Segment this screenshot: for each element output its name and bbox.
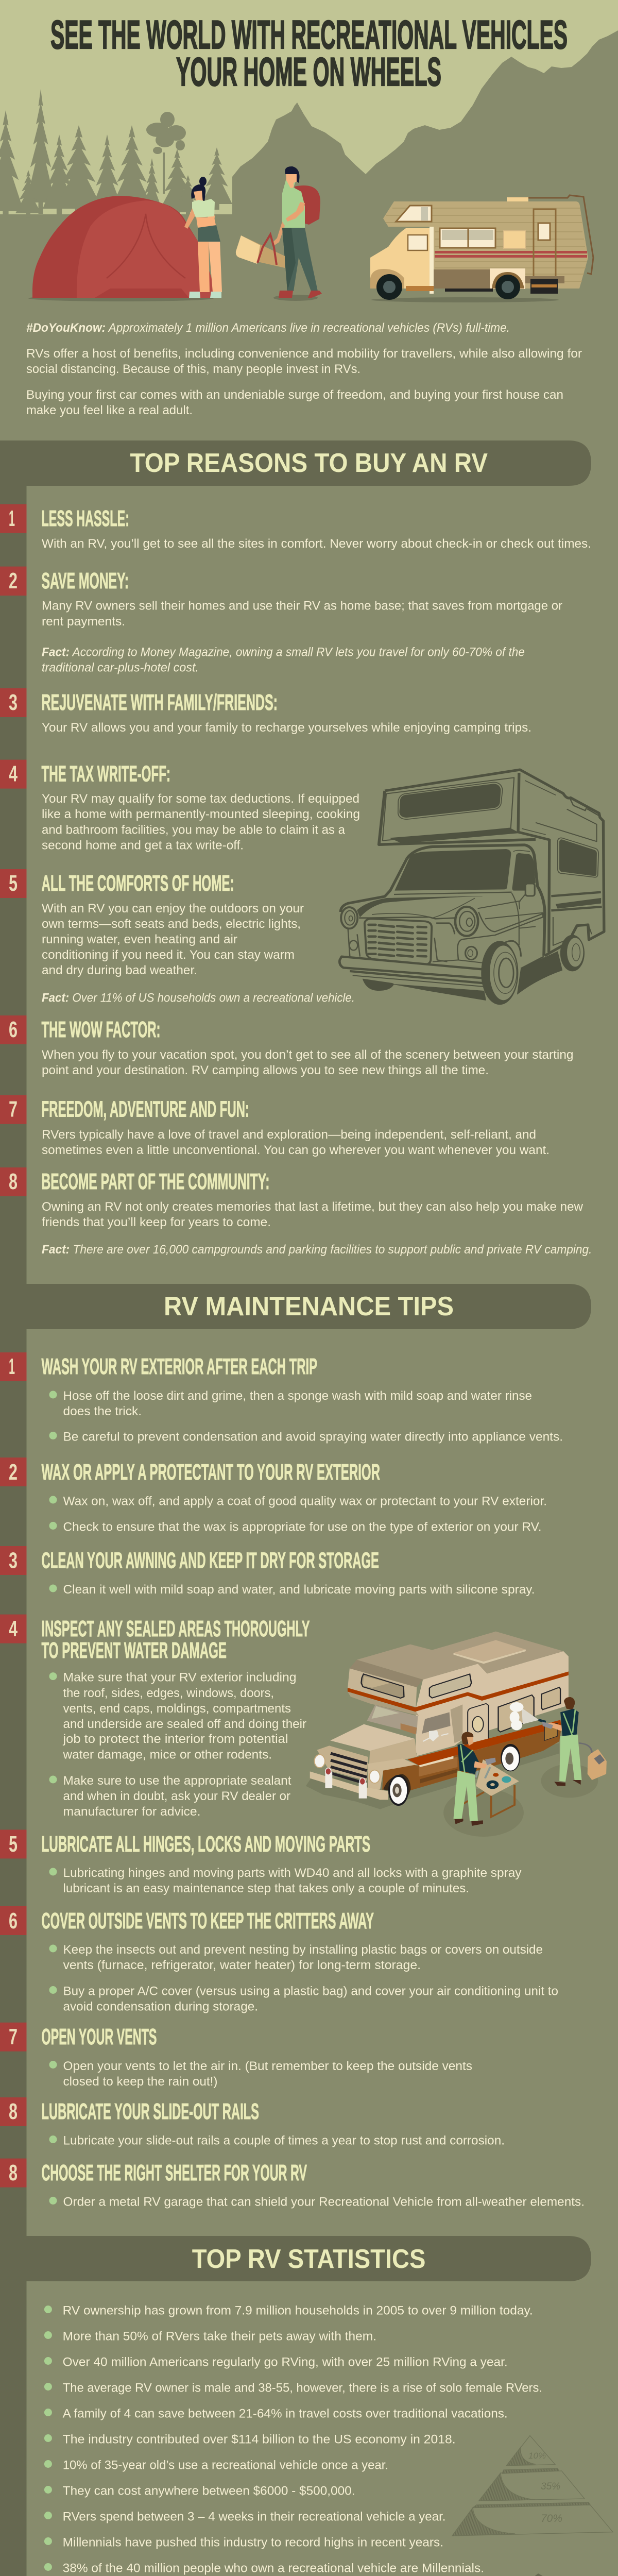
tip 4: water damage, mice or other rodents.	[62, 1748, 272, 1762]
tip 7: Open your vents to let the air in. (But remember to keep the outside vents	[63, 2059, 472, 2073]
tip 1: Hose off the loose dirt and grime, then a sponge wash with mild soap and water rinse	[63, 1389, 532, 1403]
tip 9: 8	[9, 2160, 18, 2185]
reason 8: Owning an RV not only creates memories that last a lifetime, but they can also help you make new	[42, 1200, 583, 1214]
intro text: make you feel like a real adult.	[26, 403, 193, 417]
reason 4	[0, 760, 360, 853]
reason 1: LESS HASSLE:	[41, 506, 129, 531]
illustration: sketched percentage pyramid: 10%	[528, 2451, 546, 2461]
tip 1: Be careful to prevent condensation and avoid spraying water directly into appliance vents.	[63, 1430, 563, 1444]
tip 2: Check to ensure that the wax is appropriate for use on the type of exterior on your RV.	[63, 1520, 542, 1534]
tip 9	[0, 2159, 585, 2209]
header scene background	[0, 0, 618, 217]
reason 4: and bathroom facilities, you may be able to claim it as a	[42, 823, 346, 837]
tip 5: lubricant is an easy maintenance step that takes only a couple of minutes.	[63, 1882, 469, 1895]
statistics list: Millennials have pushed this industry to record highs in recent years.	[63, 2536, 443, 2549]
illustration: woman camper	[184, 177, 222, 298]
reason 7: RVers typically have a love of travel and exploration—being independent, self-reliant, and	[42, 1128, 536, 1142]
reason 5: 5	[9, 871, 18, 896]
reason 7: sometimes even a little unconventional. You can go wherever you want whenever you want.	[42, 1143, 550, 1157]
reason 6: point and your destination. RV camping allows you to see new things all the time.	[42, 1063, 489, 1077]
tip 3: 3	[9, 1548, 18, 1573]
illustration: man with backpack and bag	[236, 166, 322, 301]
title	[50, 12, 568, 94]
section heading: statistics	[0, 2236, 591, 2281]
tip 6: Keep the insects out and prevent nesting by installing plastic bags or covers on outside	[63, 1943, 543, 1957]
reason 5: running water, even heating and air	[42, 933, 237, 946]
tip 3: Clean it well with mild soap and water, and lubricate moving parts with silicone spray.	[63, 1583, 535, 1597]
illustration: truck camper silhouette	[339, 770, 604, 1005]
reason 7: 7	[9, 1096, 18, 1122]
reason 2: Many RV owners sell their homes and use their RV as home base; that saves from mortgage or	[42, 599, 562, 613]
intro text: RVs offer a host of benefits, including convenience and mobility for travellers, while also allowing for	[26, 347, 582, 361]
tip 1: does the trick.	[63, 1404, 142, 1418]
tip 4: Make sure to use the appropriate sealant	[63, 1774, 291, 1788]
illustration: red tent	[28, 196, 219, 301]
tip 4: 4	[9, 1616, 18, 1641]
statistics list: 38% of the 40 million people who own a recreational vehicle are Millennials.	[63, 2562, 484, 2575]
reason 4: second home and get a tax write-off.	[42, 839, 244, 853]
reason 7	[0, 1095, 550, 1157]
tip 2: 2	[9, 1460, 18, 1485]
reason 4: like a home with permanently-mounted sleeping, cooking	[42, 807, 360, 821]
reason 5: ALL THE COMFORTS OF HOME:	[41, 871, 234, 896]
tip 4: TO PREVENT WATER DAMAGE	[41, 1638, 227, 1663]
reason 6	[0, 1015, 574, 1077]
reason 4: THE TAX WRITE-OFF:	[41, 761, 170, 786]
statistics list: More than 50% of RVers take their pets away with them.	[63, 2330, 376, 2343]
reason 3: 3	[9, 690, 18, 715]
reason 5: own terms—soft seats and beds, electric lights,	[42, 917, 301, 931]
statistics list: Over 40 million Americans regularly go RVing, with over 25 million RVing a year.	[63, 2355, 508, 2369]
reason 3	[0, 688, 531, 735]
tip 4: job to protect the interior from potential	[62, 1732, 288, 1746]
reason 8: BECOME PART OF THE COMMUNITY:	[41, 1169, 270, 1194]
intro text: #DoYouKnow: Approximately 1 million Americans live in recreational vehicles (RVs) full-time.	[26, 321, 510, 335]
tip 4: and when in doubt, ask your RV dealer or	[63, 1789, 290, 1803]
statistics list: 10% of 35-year old’s use a recreational vehicle once a year.	[63, 2459, 388, 2472]
reason 8: Fact: There are over 16,000 campgrounds and parking facilities to support public and private RV camping.	[42, 1243, 592, 1257]
reason 8: 8	[9, 1169, 18, 1194]
reason 5: Fact: Over 11% of US households own a recreational vehicle.	[42, 991, 355, 1005]
reason 7: FREEDOM, ADVENTURE AND FUN:	[41, 1096, 249, 1122]
tip 8	[0, 2097, 505, 2147]
tip 5: 5	[9, 1832, 18, 1857]
statistics list: RVers spend between 3 – 4 weeks in their recreational vehicle a year.	[63, 2510, 445, 2523]
reason 8: friends that you’ll keep for years to come.	[42, 1215, 271, 1229]
illustration: sketched percentage pyramid	[452, 2436, 613, 2536]
tip 7: OPEN YOUR VENTS	[41, 2024, 157, 2049]
section heading: top reasons: TOP REASONS TO BUY AN RV	[130, 448, 488, 478]
tip 7	[0, 2023, 472, 2089]
tip 5: Lubricating hinges and moving parts with WD40 and all locks with a graphite spray	[63, 1866, 521, 1880]
reason 4: Your RV may qualify for some tax deductions. If equipped	[42, 792, 359, 806]
illustration: motorhome	[370, 195, 593, 302]
intro text: Buying your first car comes with an undeniable surge of freedom, and buying your first house can	[26, 388, 563, 402]
tip 4: vents, end caps, moldings, compartments	[63, 1702, 291, 1716]
tip 2: Wax on, wax off, and apply a coat of good quality wax or protectant to your RV exterior.	[63, 1494, 547, 1508]
tip 4: manufacturer for advice.	[63, 1805, 201, 1819]
statistics list: They can cost anywhere between $6000 - $500,000.	[63, 2484, 355, 2498]
reason 2: SAVE MONEY:	[41, 568, 129, 594]
reason 5: With an RV you can enjoy the outdoors on your	[42, 902, 304, 916]
reason 2	[0, 567, 562, 675]
reason 1: 1	[9, 506, 15, 531]
left vertical bar	[0, 440, 27, 2576]
statistics list	[44, 2304, 542, 2576]
tip 1: WASH YOUR RV EXTERIOR AFTER EACH TRIP	[41, 1354, 317, 1379]
statistics list: A family of 4 can save between 21-64% in travel costs over traditional vacations.	[63, 2407, 508, 2420]
tip 7: closed to keep the rain out!)	[63, 2075, 217, 2089]
tip 8: LUBRICATE YOUR SLIDE-OUT RAILS	[41, 2099, 259, 2124]
tip 4: INSPECT ANY SEALED AREAS THOROUGHLY	[41, 1616, 310, 1641]
reason 3: Your RV allows you and your family to recharge yourselves while enjoying camping trips.	[42, 721, 531, 735]
tip 4	[0, 1615, 310, 1819]
tip 4: the roof, sides, edges, windows, doors,	[63, 1686, 274, 1700]
illustration: isometric RV with mechanics	[306, 1632, 607, 1837]
intro text	[26, 321, 582, 417]
statistics list: The average RV owner is male and 38-55, however, there is a rise of solo female RVers.	[63, 2381, 542, 2395]
tip 9: CHOOSE THE RIGHT SHELTER FOR YOUR RV	[41, 2160, 307, 2185]
reason 2: traditional car-plus-hotel cost.	[42, 661, 199, 675]
section heading: statistics: TOP RV STATISTICS	[192, 2244, 425, 2274]
tip 6: vents (furnace, refrigerator, water heater) for long-term storage.	[63, 1958, 421, 1972]
reason 1: With an RV, you’ll get to see all the sites in comfort. Never worry about check-in or check out times.	[42, 537, 591, 551]
reason 8	[0, 1167, 592, 1257]
reason 6: When you fly to your vacation spot, you don’t get to see all of the scenery between your starting	[42, 1048, 574, 1062]
tip 6: Buy a proper A/C cover (versus using a plastic bag) and cover your air conditioning unit to	[63, 1985, 558, 1998]
reason 5: and dry during bad weather.	[42, 963, 197, 977]
statistics list: RV ownership has grown from 7.9 million households in 2005 to over 9 million today.	[63, 2304, 533, 2317]
reason 6: 6	[9, 1017, 18, 1042]
reason 4: 4	[9, 761, 18, 786]
illustration: sketched percentage pyramid: 35%	[541, 2481, 560, 2492]
statistics list: The industry contributed over $114 billion to the US economy in 2018.	[63, 2433, 456, 2446]
tip 8: Lubricate your slide-out rails a couple of times a year to stop rust and corrosion.	[63, 2134, 505, 2147]
reason 6: THE WOW FACTOR:	[41, 1017, 161, 1042]
forest silhouette	[0, 89, 232, 222]
tip 5	[0, 1829, 521, 1895]
tip 3	[0, 1546, 535, 1597]
reason 5: conditioning if you need it. You can stay warm	[42, 948, 295, 962]
reason 2: Fact: According to Money Magazine, owning a small RV lets you travel for only 60-70% of the	[42, 646, 525, 659]
section heading: maintenance tips: RV MAINTENANCE TIPS	[164, 1292, 454, 1321]
tip 1: 1	[9, 1354, 15, 1379]
section heading: top reasons	[0, 440, 591, 486]
tip 4: Make sure that your RV exterior including	[63, 1671, 297, 1685]
tip 2	[0, 1458, 547, 1534]
reason 5	[0, 869, 355, 1005]
tip 6	[0, 1906, 558, 2013]
tip 1	[0, 1352, 563, 1444]
intro text: social distancing. Because of this, many people invest in RVs.	[26, 362, 360, 376]
tip 6: 6	[9, 1908, 18, 1934]
reason 2: 2	[9, 568, 18, 594]
reason 1	[0, 504, 591, 551]
desert silhouette backdrop	[45, 2573, 618, 2576]
section heading: maintenance tips	[0, 1284, 591, 1329]
reason 3: REJUVENATE WITH FAMILY/FRIENDS:	[41, 690, 278, 715]
tip 7: 7	[9, 2024, 18, 2049]
tip 9: Order a metal RV garage that can shield your Recreational Vehicle from all-weather elements.	[63, 2195, 585, 2209]
tip 6: avoid condensation during storage.	[63, 2000, 258, 2013]
tip 4: and underside are sealed off and doing their	[63, 1717, 306, 1731]
reason 2: rent payments.	[42, 615, 125, 629]
tip 8: 8	[9, 2099, 18, 2124]
illustration: sketched percentage pyramid: 70%	[541, 2513, 562, 2524]
